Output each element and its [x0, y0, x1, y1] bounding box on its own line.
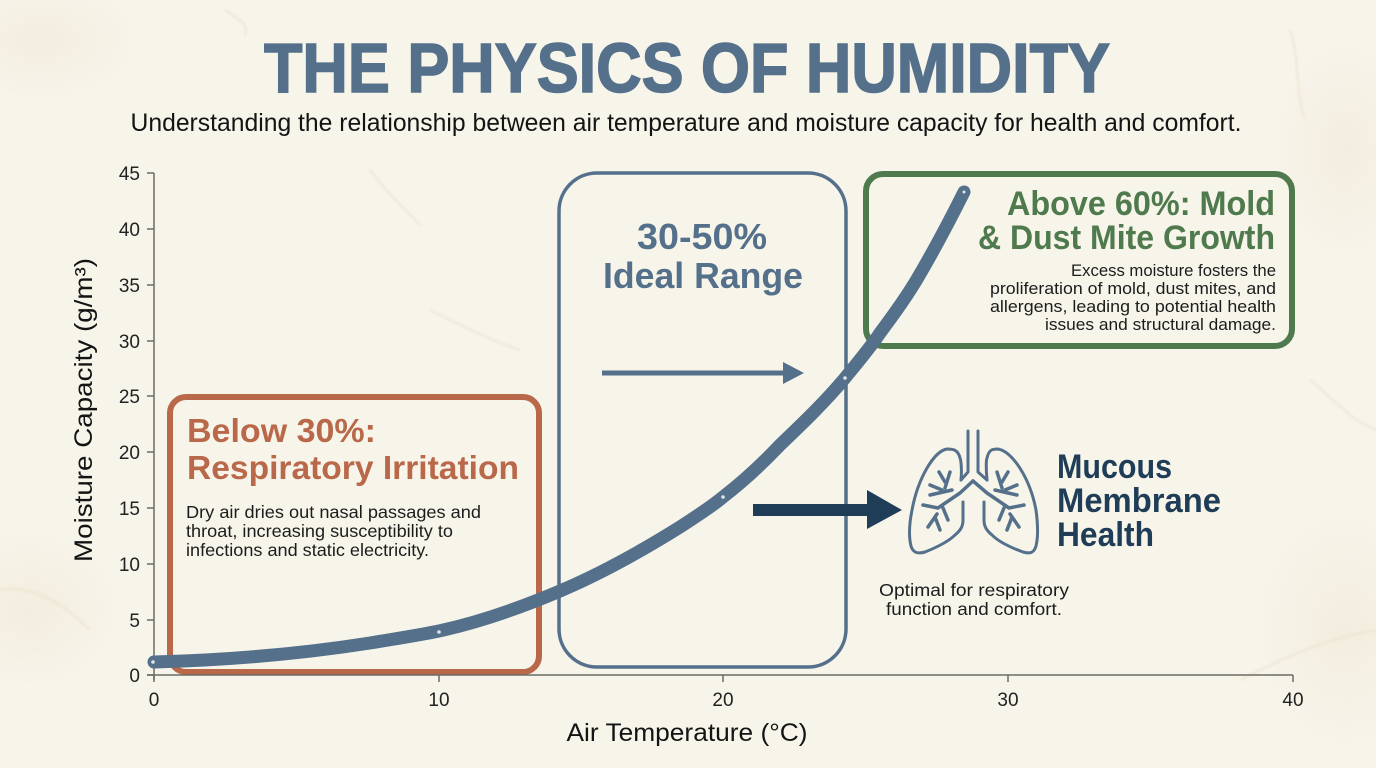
y tick labels: 0 — [129, 666, 140, 687]
text: optimal for respiratory function — [879, 580, 1069, 619]
y tick labels: 25 — [119, 387, 140, 408]
x tick labels — [149, 690, 1304, 711]
heading: 30-50%: 30-50% — [637, 216, 767, 257]
subtitle: Understanding the relationship between air temperature and moisture capacity for health and comfort. — [130, 109, 1242, 137]
heading: mucous membrane health: Mucous — [1057, 448, 1172, 486]
text: dry air description — [186, 502, 481, 560]
y tick labels: 45 — [119, 164, 140, 185]
y tick labels: 35 — [119, 276, 140, 297]
panel: below 30% respiratory irritation — [170, 397, 539, 672]
x tick labels: 10 — [428, 690, 450, 711]
arrow: to mucous membrane health — [753, 490, 902, 529]
icon: lungs — [910, 431, 1038, 553]
text: excess moisture description: Excess moisture fosters the — [1071, 262, 1276, 280]
y tick labels: 20 — [119, 443, 140, 464]
heading: below 30%: Below 30%: — [187, 412, 376, 449]
y tick labels — [119, 164, 140, 687]
y axis title: Moisture Capacity (g/m³) — [70, 258, 98, 562]
x axis — [147, 675, 1293, 682]
y tick labels: 5 — [129, 611, 140, 632]
text: optimal for respiratory function: Optimal for respiratory — [879, 580, 1069, 600]
panel: above 60% mold and dust mite growth — [866, 174, 1292, 346]
arrow: ideal range — [602, 362, 804, 384]
heading: dust mite growth: & Dust Mite Growth — [978, 219, 1275, 257]
heading: mucous membrane health: Health — [1057, 516, 1154, 554]
chart: moisture capacity vs air temperature — [70, 164, 1304, 747]
text: excess moisture description — [990, 262, 1276, 334]
data points — [151, 190, 965, 664]
heading: ideal range: Ideal Range — [603, 255, 803, 296]
x tick labels: 30 — [997, 690, 1019, 711]
text: excess moisture description: allergens, leading to potential health — [990, 298, 1276, 316]
y tick labels: 30 — [119, 332, 140, 353]
text: dry air description: Dry air dries out nasal passages and — [186, 502, 481, 522]
x tick labels: 20 — [712, 690, 734, 711]
x tick labels: 40 — [1282, 690, 1304, 711]
heading: mucous membrane health: Membrane — [1057, 482, 1221, 520]
text: excess moisture description: proliferation of mold, dust mites, and — [990, 280, 1276, 298]
x axis title: Air Temperature (°C) — [566, 719, 808, 747]
text: optimal for respiratory function: function and comfort. — [886, 599, 1062, 619]
title: THE PHYSICS OF HUMIDITY — [264, 29, 1110, 107]
humidity curve — [154, 192, 964, 662]
panel: 30-50% ideal range — [559, 173, 846, 667]
text: excess moisture description: issues and structural damage. — [1045, 316, 1276, 334]
y tick labels: 40 — [119, 220, 140, 241]
y axis — [147, 173, 154, 680]
y tick labels: 10 — [119, 555, 140, 576]
text: dry air description: throat, increasing susceptibility to — [186, 521, 453, 541]
y tick labels: 15 — [119, 499, 140, 520]
text: dry air description: infections and static electricity. — [186, 540, 429, 560]
heading: mucous membrane health — [1057, 448, 1221, 554]
x tick labels: 0 — [149, 690, 159, 711]
heading: above 60% mold: Above 60%: Mold — [1007, 185, 1275, 223]
heading: respiratory irritation: Respiratory Irritation — [187, 449, 519, 486]
